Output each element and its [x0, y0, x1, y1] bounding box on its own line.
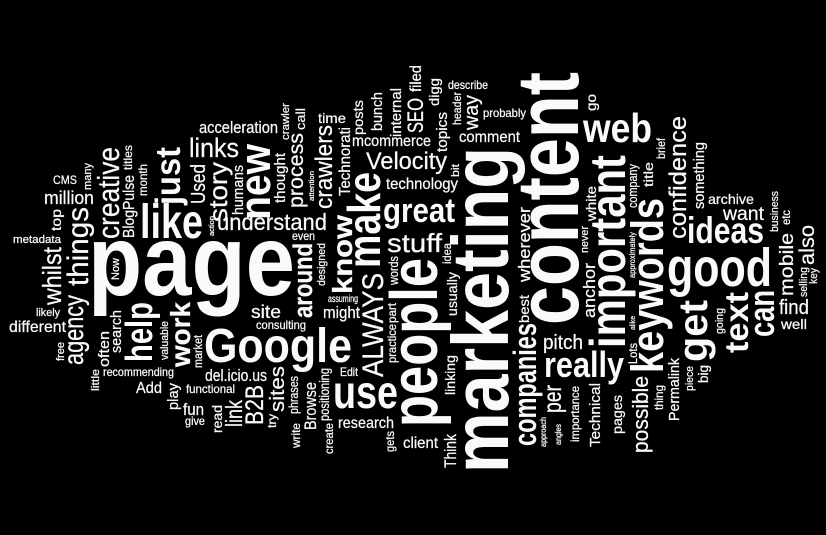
word: even: even	[292, 229, 315, 243]
word: well: well	[780, 316, 807, 332]
word: metadata: metadata	[13, 234, 62, 246]
word: importance: importance	[568, 386, 582, 442]
word: things: things	[62, 207, 95, 286]
word: usually: usually	[444, 272, 460, 316]
word: SEO: SEO	[403, 98, 428, 133]
word: call: call	[293, 108, 308, 130]
word: write: write	[289, 423, 303, 449]
word: Browse: Browse	[301, 382, 320, 430]
word: key: key	[808, 268, 820, 284]
word: Now: Now	[110, 258, 122, 280]
word: attention: attention	[309, 171, 316, 201]
word: many: many	[82, 163, 94, 190]
word: creative: creative	[91, 147, 126, 239]
word: way: way	[461, 95, 483, 131]
word: link: link	[221, 400, 247, 427]
word: possible: possible	[628, 376, 653, 453]
word: digg: digg	[426, 78, 442, 106]
word: research: research	[338, 415, 394, 432]
word: page: page	[88, 205, 295, 317]
word: story: story	[203, 162, 233, 222]
biggest words	[88, 72, 782, 473]
word: consulting: consulting	[256, 318, 306, 332]
word: acceleration: acceleration	[199, 118, 278, 137]
word: going: going	[714, 308, 726, 334]
word: million: million	[44, 188, 94, 208]
word: web: web	[582, 105, 652, 151]
word: internal: internal	[388, 88, 405, 137]
word: likely: likely	[36, 307, 60, 319]
word: free: free	[55, 342, 67, 361]
word: month: month	[136, 164, 150, 196]
word: technology: technology	[386, 176, 458, 193]
word: confidence: confidence	[665, 116, 692, 239]
word: alike: alike	[630, 316, 637, 330]
word: brief: brief	[654, 137, 668, 159]
word: comment: comment	[459, 129, 521, 146]
word: site: site	[251, 302, 281, 322]
word: Think: Think	[441, 434, 460, 468]
mid-sized and small words	[9, 65, 820, 468]
word: functional: functional	[186, 382, 235, 396]
word: create: create	[322, 423, 336, 454]
word: often: often	[96, 331, 113, 367]
word: help: help	[119, 302, 161, 362]
word: title: title	[641, 162, 656, 187]
word: Technorati: Technorati	[337, 127, 354, 196]
word: crawler: crawler	[280, 103, 292, 140]
word: marketing: marketing	[436, 147, 525, 473]
word: assuming: assuming	[328, 294, 358, 305]
word: top: top	[48, 209, 64, 231]
word: links: links	[189, 133, 239, 163]
word: designed: designed	[316, 243, 328, 286]
word: words: words	[386, 256, 401, 286]
word: Velocity: Velocity	[366, 148, 447, 175]
word: humans: humans	[230, 165, 247, 215]
word: agency: agency	[58, 295, 89, 365]
word: Technical: Technical	[587, 383, 604, 447]
word: Used: Used	[188, 164, 210, 204]
word: get: get	[670, 300, 716, 362]
word: recommending: recommending	[103, 365, 174, 379]
word: Permalink: Permalink	[666, 358, 683, 421]
word: want: want	[722, 204, 765, 225]
word: filed: filed	[408, 65, 425, 92]
word: client: client	[403, 435, 439, 452]
word: know: know	[327, 215, 358, 294]
word: valuable: valuable	[159, 321, 171, 360]
word: market: market	[191, 334, 205, 368]
word: go: go	[583, 94, 599, 111]
word: ALWAYS: ALWAYS	[357, 273, 390, 377]
word: try: try	[265, 414, 279, 428]
word: BlogPulse: BlogPulse	[121, 175, 138, 238]
word: little: little	[90, 369, 102, 391]
word: part: part	[385, 302, 399, 323]
word: never: never	[579, 226, 591, 253]
word: ideas: ideas	[687, 210, 764, 251]
word: really: really	[544, 344, 624, 385]
word: business: business	[769, 191, 781, 232]
word: play: play	[165, 383, 182, 410]
word: keywords: keywords	[622, 198, 673, 373]
word: white: white	[583, 186, 599, 222]
word: company: company	[625, 164, 640, 208]
word: pitch: pitch	[543, 332, 583, 354]
word: something: something	[691, 142, 708, 209]
word: big: big	[695, 365, 711, 383]
word: search: search	[108, 310, 125, 353]
word: bit: bit	[450, 164, 462, 177]
word: time: time	[318, 110, 346, 126]
word: read: read	[209, 405, 225, 433]
word: etc: etc	[779, 210, 793, 225]
word: make: make	[338, 172, 390, 268]
word: different: different	[9, 319, 67, 336]
word: approach: approach	[539, 417, 548, 447]
word: also: also	[796, 225, 819, 265]
word: probably: probably	[483, 106, 526, 120]
word: bunch: bunch	[369, 92, 386, 131]
word: action: action	[209, 216, 216, 236]
word: CMS: CMS	[53, 173, 77, 187]
word: topics: topics	[434, 112, 451, 152]
word: fun: fun	[183, 400, 204, 419]
word: great: great	[383, 192, 455, 230]
word: can: can	[741, 290, 782, 337]
word: find: find	[779, 297, 809, 319]
word: best: best	[516, 295, 532, 323]
word: content: content	[498, 72, 597, 325]
word: might: might	[323, 303, 360, 322]
word: work: work	[165, 302, 196, 368]
word: anchor: anchor	[580, 263, 599, 318]
word: just: just	[149, 147, 188, 206]
word: practice: practice	[385, 324, 399, 363]
word: thought: thought	[272, 152, 289, 203]
word: phrases: phrases	[286, 376, 301, 414]
word: piece: piece	[684, 366, 696, 391]
word: pages: pages	[609, 395, 625, 434]
word: idea: idea	[440, 243, 454, 264]
word: header: header	[450, 92, 464, 125]
word: process: process	[285, 133, 308, 208]
word: B2B: B2B	[241, 385, 269, 425]
word: stuff: stuff	[387, 228, 443, 258]
word: whilst: whilst	[37, 246, 67, 306]
word: titles: titles	[121, 145, 135, 170]
word: positioning: positioning	[316, 368, 332, 421]
word: important: important	[580, 155, 636, 348]
word: around: around	[288, 243, 318, 318]
word: approximately: approximately	[628, 232, 637, 278]
word: linking: linking	[442, 355, 458, 395]
word: text: text	[718, 292, 755, 353]
word: give: give	[185, 414, 205, 428]
word: del.icio.us: del.icio.us	[205, 366, 267, 385]
word: new: new	[231, 143, 280, 220]
word: archive: archive	[708, 191, 754, 207]
word: Add: Add	[136, 380, 162, 397]
word: posts: posts	[350, 100, 366, 135]
word: use: use	[333, 366, 398, 418]
word: Lots: Lots	[626, 343, 640, 364]
word: Google: Google	[204, 320, 352, 373]
word: mobile: mobile	[777, 233, 798, 296]
word: thing: thing	[652, 385, 666, 410]
word: selling: selling	[798, 267, 810, 297]
word: gets: gets	[383, 431, 397, 452]
word: like: like	[140, 196, 203, 249]
word: per: per	[539, 385, 567, 413]
word: wherever: wherever	[515, 207, 534, 283]
word: Edit: Edit	[340, 365, 359, 379]
word: good: good	[667, 238, 772, 298]
word: describe: describe	[448, 78, 488, 92]
word: people: people	[377, 258, 452, 427]
word: crawlers: crawlers	[311, 125, 338, 209]
word: mcommerce: mcommerce	[352, 133, 431, 150]
word: sites: sites	[267, 366, 289, 412]
word: companies: companies	[507, 323, 543, 446]
word: angles: angles	[554, 424, 563, 445]
word: understand: understand	[217, 209, 327, 235]
